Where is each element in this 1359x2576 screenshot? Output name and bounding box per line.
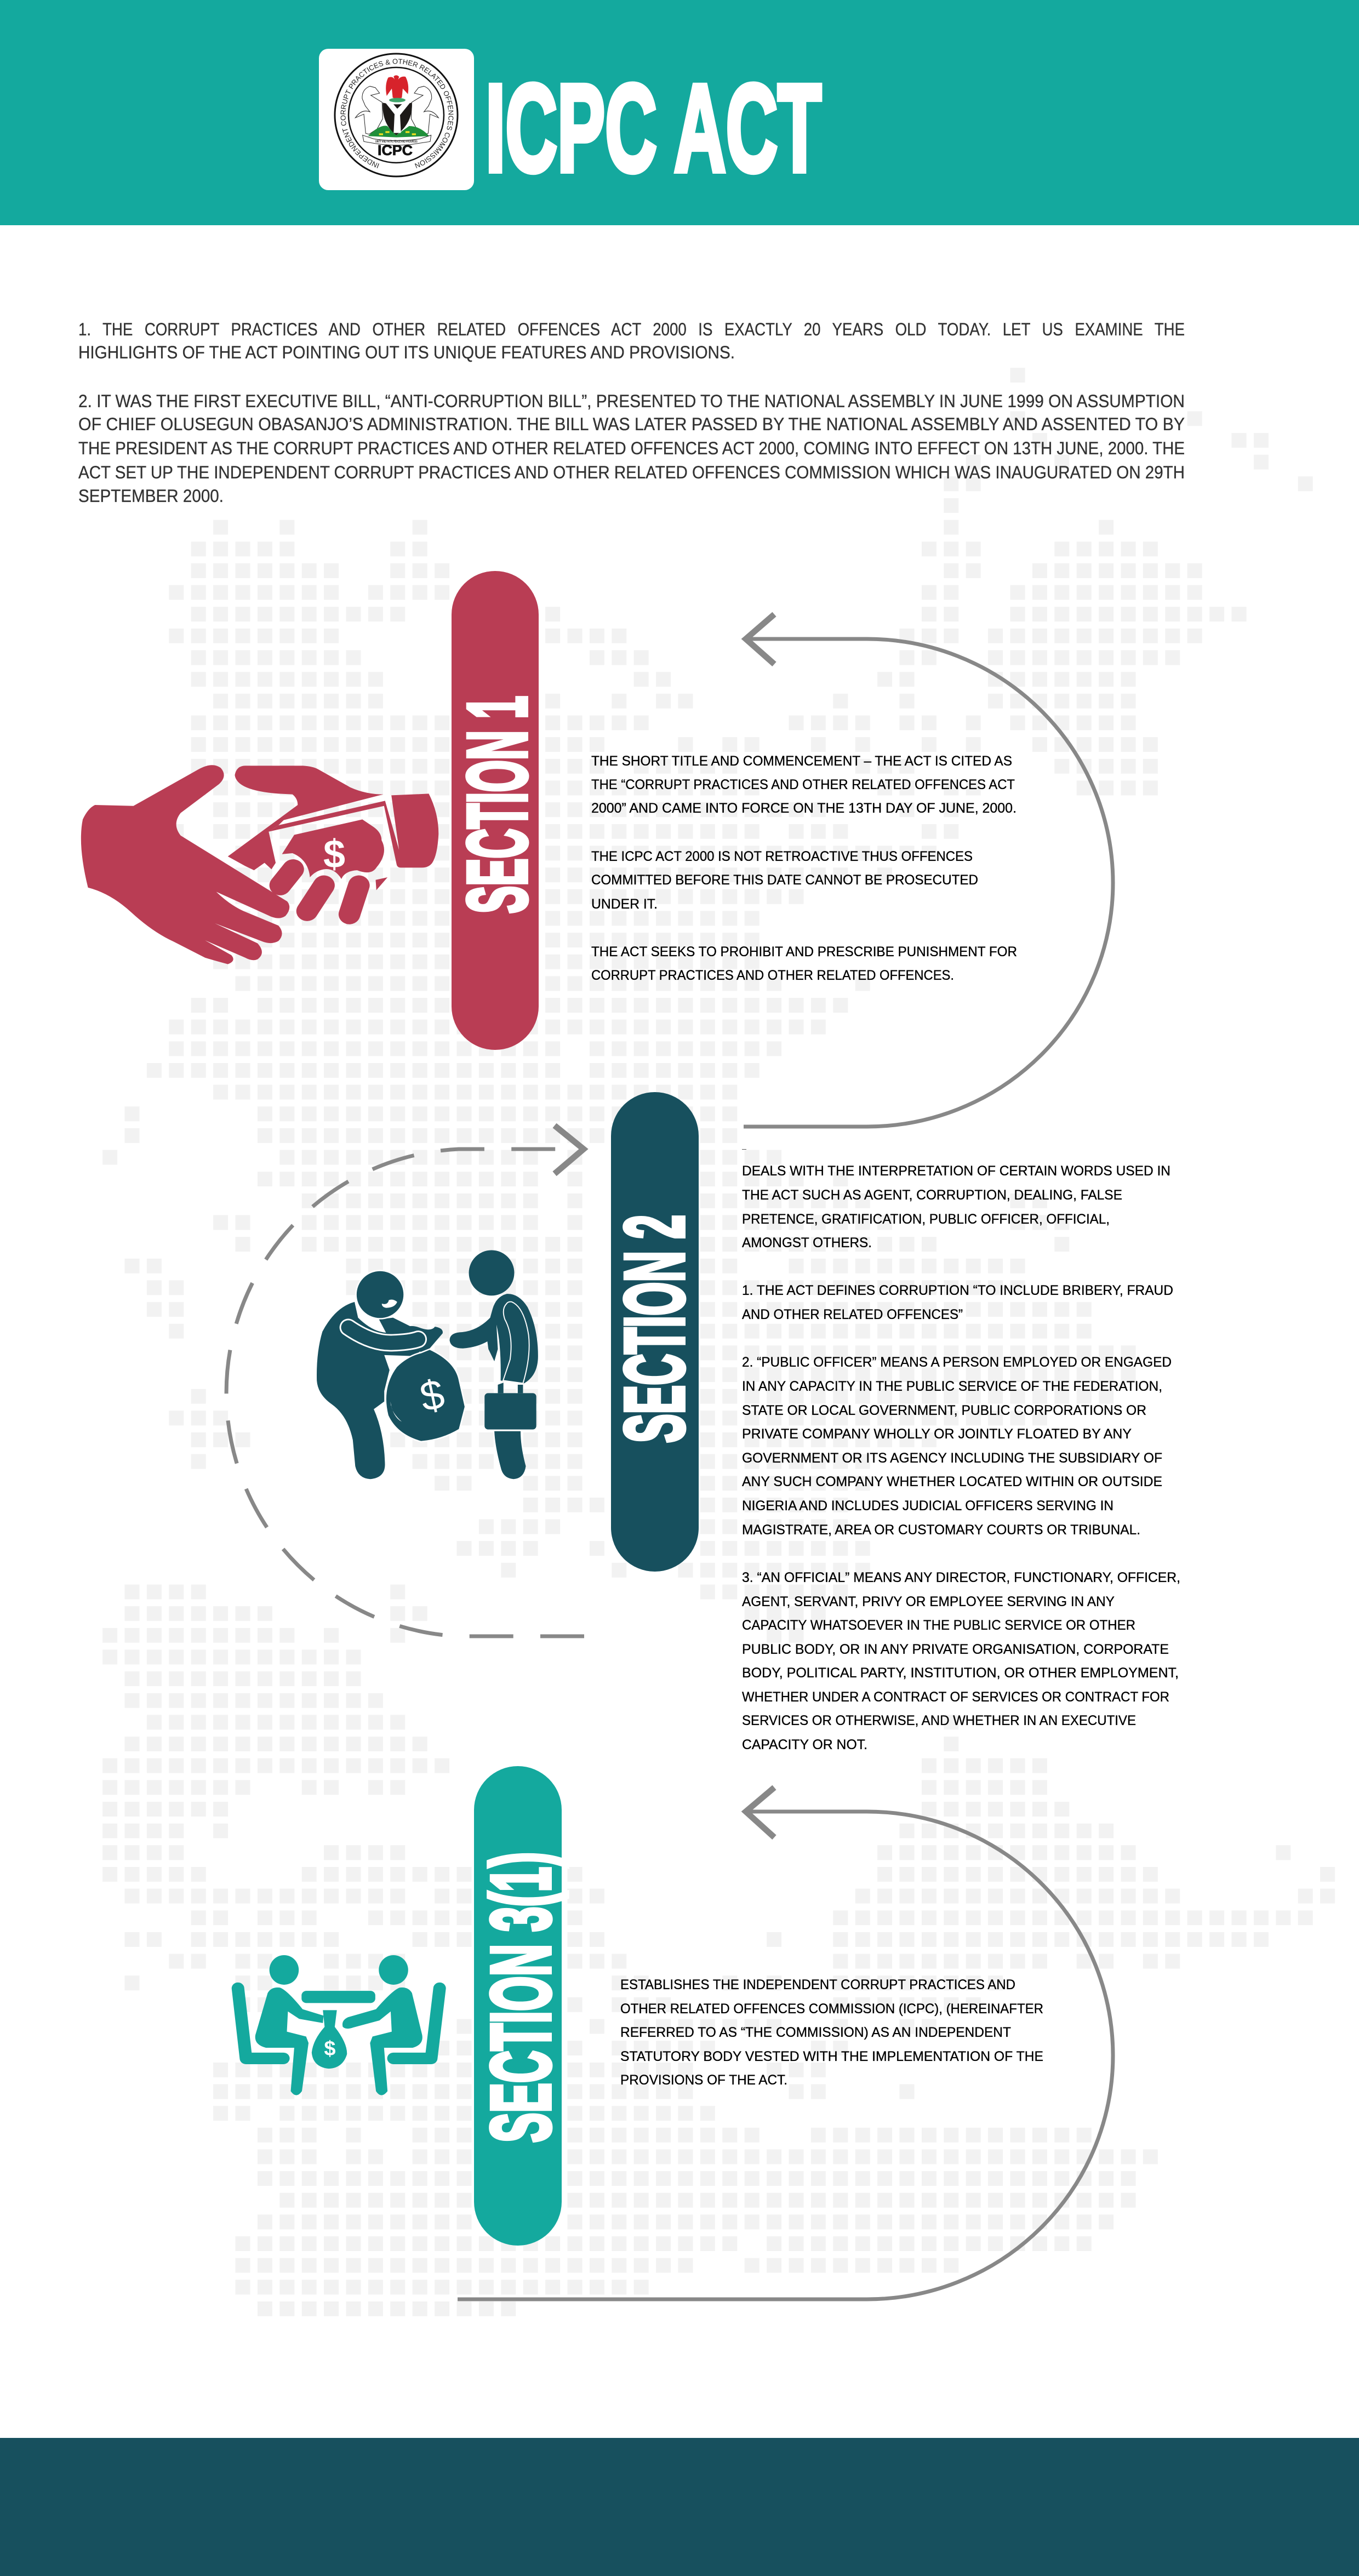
text block: section 3(1): OTHER RELATED OFFENCES COMMISSION (ICPC), (HEREINAFTER xyxy=(620,2001,1043,2017)
intro text block xyxy=(78,319,1185,506)
text block: section 2: NIGERIA AND INCLUDES JUDICIAL OFFICERS SERVING IN xyxy=(742,1498,1114,1513)
text block: section 2: DEALS WITH THE INTERPRETATION OF CERTAIN WORDS USED IN xyxy=(742,1163,1170,1179)
text block: section 2: 2. “PUBLIC OFFICER” MEANS A PERSON EMPLOYED OR ENGAGED xyxy=(742,1355,1172,1370)
pill: section 3(1) xyxy=(474,1766,568,2246)
text block: section 2: PRIVATE COMPANY WHOLLY OR JOINTLY FLOATED BY ANY xyxy=(742,1426,1132,1442)
text block: section 1: THE “CORRUPT PRACTICES AND OTHER RELATED OFFENCES ACT xyxy=(591,777,1015,792)
pill: section 3(1): SECTION 3(1) xyxy=(474,1852,568,2143)
text block: section 2: CAPACITY WHATSOEVER IN THE PUBLIC SERVICE OR OTHER xyxy=(742,1618,1135,1633)
pill: section 2: SECTION 2 xyxy=(608,1215,701,1443)
text block: section 2: AGENT, SERVANT, PRIVY OR EMPLOYEE SERVING IN ANY xyxy=(742,1594,1115,1609)
text block: section 2: 1. THE ACT DEFINES CORRUPTION “TO INCLUDE BRIBERY, FRAUD xyxy=(742,1283,1173,1298)
header band xyxy=(0,0,1359,225)
text block: section 2: PUBLIC BODY, OR IN ANY PRIVATE ORGANISATION, CORPORATE xyxy=(742,1642,1169,1657)
text block: section 1 xyxy=(591,753,1017,983)
icon: handshake passing money xyxy=(81,765,438,964)
background: dotted world map xyxy=(102,375,1342,2309)
footer band xyxy=(0,2438,1359,2576)
pill: section 2 xyxy=(608,1092,701,1572)
text block: section 1: THE ACT SEEKS TO PROHIBIT AND PRESCRIBE PUNISHMENT FOR xyxy=(591,944,1017,959)
intro text block: 1. THE CORRUPT PRACTICES AND OTHER RELATED OFFENCES ACT 2000 IS EXACTLY 20 YEARS OLD TODAY. LET US EXAMINE THE xyxy=(78,319,1185,339)
text block: section 2: AND OTHER RELATED OFFENCES” xyxy=(742,1307,963,1322)
logo: ICPC seal: ICPC xyxy=(378,142,413,158)
intro text block: SEPTEMBER 2000. xyxy=(78,486,224,506)
text block: section 1: THE ICPC ACT 2000 IS NOT RETROACTIVE THUS OFFENCES xyxy=(591,849,973,864)
text block: section 1: 2000” AND CAME INTO FORCE ON THE 13TH DAY OF JUNE, 2000. xyxy=(591,801,1017,816)
text block: section 1: COMMITTED BEFORE THIS DATE CANNOT BE PROSECUTED xyxy=(591,872,978,888)
text block: section 2: STATE OR LOCAL GOVERNMENT, PUBLIC CORPORATIONS OR xyxy=(742,1403,1146,1418)
text block: section 3(1): REFERRED TO AS “THE COMMISSION) AS AN INDEPENDENT xyxy=(620,2025,1011,2040)
intro text block: HIGHLIGHTS OF THE ACT POINTING OUT ITS UNIQUE FEATURES AND PROVISIONS. xyxy=(78,342,735,362)
logo: ICPC seal: INDEPENDENT CORRUPT PRACTICES & OTHER RELATED OFFENCES COMMISSION xyxy=(341,59,454,168)
text block: section 2: CAPACITY OR NOT. xyxy=(742,1737,867,1752)
text block: section 2: WHETHER UNDER A CONTRACT OF SERVICES OR CONTRACT FOR xyxy=(742,1689,1169,1705)
text block: section 2: BODY, POLITICAL PARTY, INSTITUTION, OR OTHER EMPLOYMENT, xyxy=(742,1665,1179,1681)
icon: two people seated at table with money bag: $ xyxy=(324,2037,336,2060)
pill: section 1: SECTION 1 xyxy=(450,696,544,913)
icon: two men exchanging money bag: $ xyxy=(416,1370,448,1421)
text block: section 2: 3. “AN OFFICIAL” MEANS ANY DIRECTOR, FUNCTIONARY, OFFICER, xyxy=(742,1570,1180,1585)
text block: section 3(1): STATUTORY BODY VESTED WITH THE IMPLEMENTATION OF THE xyxy=(620,2049,1043,2064)
text block: section 2 xyxy=(742,1163,1180,1752)
text block: section 2: PRETENCE, GRATIFICATION, PUBLIC OFFICER, OFFICIAL, xyxy=(742,1212,1110,1227)
text block: section 3(1): PROVISIONS OF THE ACT. xyxy=(620,2072,787,2088)
arrow: section 2 dashed connector xyxy=(226,1126,584,1636)
title: ICPC ACT xyxy=(486,59,821,198)
text block: section 2: MAGISTRATE, AREA OR CUSTOMARY COURTS OR TRIBUNAL. xyxy=(742,1522,1140,1538)
logo: ICPC seal: UNITY AND FAITH, PEACE AND PROGRESS xyxy=(375,140,418,144)
text block: section 3(1) xyxy=(620,1977,1043,2088)
pill: section 1 xyxy=(450,571,544,1050)
small stray mark xyxy=(742,1149,746,1150)
intro text block: ACT SET UP THE INDEPENDENT CORRUPT PRACTICES AND OTHER RELATED OFFENCES COMMISSION WHICH WAS INAUGURATED ON 29TH xyxy=(78,462,1185,482)
arrow: section 1 curved connector xyxy=(744,614,1113,1127)
icon: two men exchanging money bag xyxy=(317,1250,538,1479)
text block: section 2: IN ANY CAPACITY IN THE PUBLIC SERVICE OF THE FEDERATION, xyxy=(742,1379,1162,1394)
text block: section 2: ANY SUCH COMPANY WHETHER LOCATED WITHIN OR OUTSIDE xyxy=(742,1474,1162,1489)
text block: section 2: THE ACT SUCH AS AGENT, CORRUPTION, DEALING, FALSE xyxy=(742,1187,1122,1203)
text block: section 1: CORRUPT PRACTICES AND OTHER RELATED OFFENCES. xyxy=(591,968,954,983)
text block: section 2: AMONGST OTHERS. xyxy=(742,1235,872,1250)
arrow: section 3 curved connector xyxy=(458,1787,1113,2299)
icon: two people seated at table with money bag xyxy=(238,1955,439,2095)
text block: section 2: GOVERNMENT OR ITS AGENCY INCLUDING THE SUBSIDIARY OF xyxy=(742,1450,1162,1466)
intro text block: THE PRESIDENT AS THE CORRUPT PRACTICES AND OTHER RELATED OFFENCES ACT 2000, COMING INTO EFFECT ON 13TH JUNE, 2000. THE xyxy=(78,438,1185,458)
text block: section 3(1): ESTABLISHES THE INDEPENDENT CORRUPT PRACTICES AND xyxy=(620,1977,1015,1992)
icon: handshake passing money: $ xyxy=(323,832,345,876)
text block: section 1: UNDER IT. xyxy=(591,896,658,912)
logo: ICPC seal xyxy=(319,49,474,190)
text block: section 2: SERVICES OR OTHERWISE, AND WHETHER IN AN EXECUTIVE xyxy=(742,1713,1136,1728)
text block: section 1: THE SHORT TITLE AND COMMENCEMENT – THE ACT IS CITED AS xyxy=(591,753,1012,769)
intro text block: 2. IT WAS THE FIRST EXECUTIVE BILL, “ANTI-CORRUPTION BILL”, PRESENTED TO THE NATIONAL ASSEMBLY IN JUNE 1999 ON ASSUMPTION xyxy=(78,391,1185,411)
intro text block: OF CHIEF OLUSEGUN OBASANJO’S ADMINISTRATION. THE BILL WAS LATER PASSED BY THE NATIONAL ASSEMBLY AND ASSENTED TO BY xyxy=(78,414,1185,434)
